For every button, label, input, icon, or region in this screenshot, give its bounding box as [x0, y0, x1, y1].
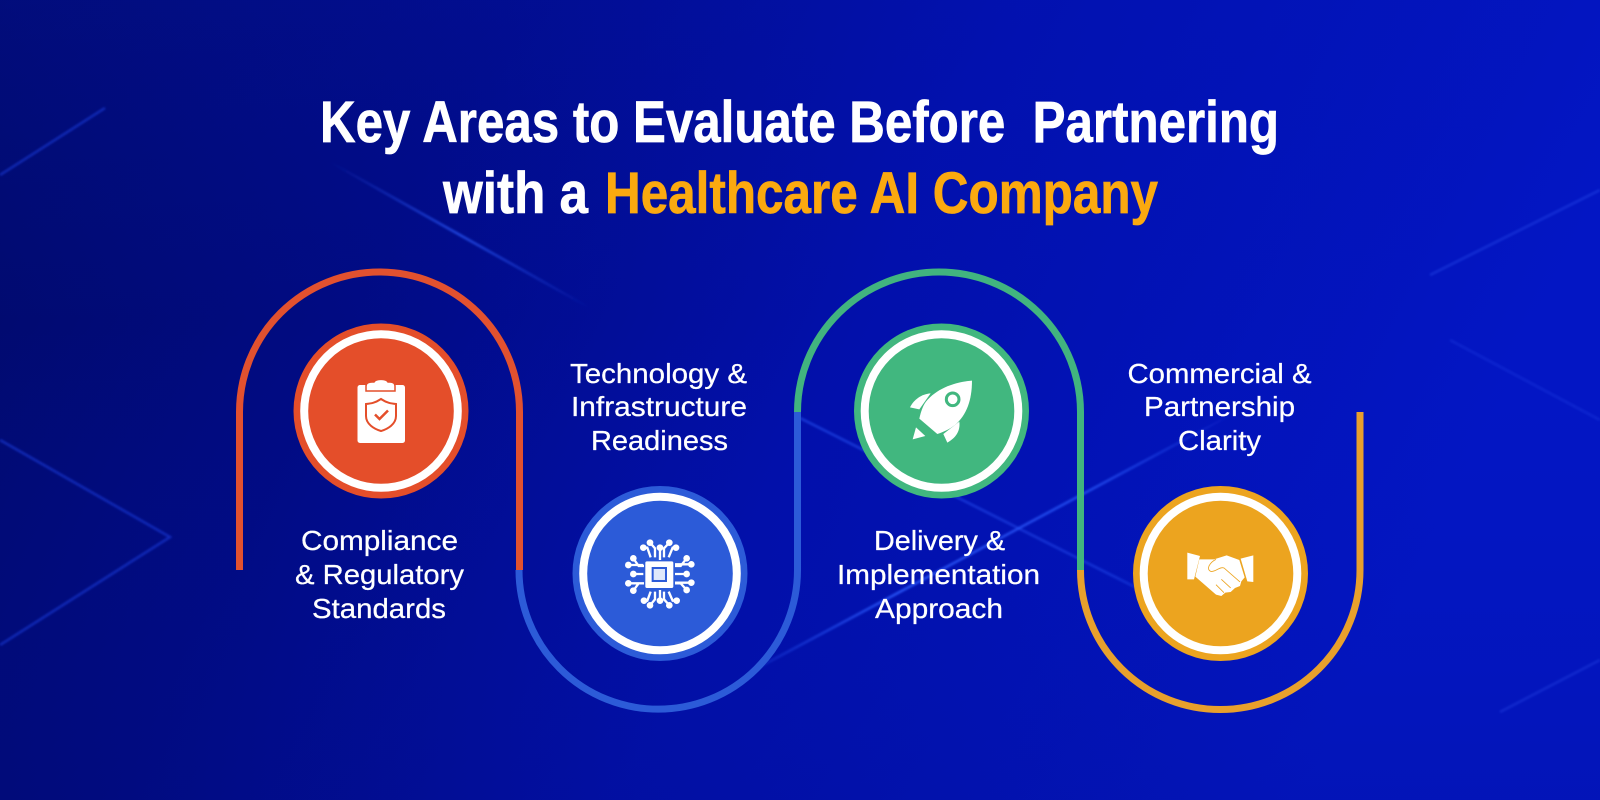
label: commercial: Commercial &	[1128, 358, 1312, 389]
connector path: green arch	[798, 272, 1080, 570]
badge: compliance	[294, 324, 468, 498]
label: delivery: Implementation	[837, 559, 1040, 590]
step 1: compliance	[294, 324, 468, 624]
badge: technology	[572, 486, 748, 661]
icon: rocket	[910, 381, 972, 443]
label: delivery: Delivery &	[874, 525, 1005, 556]
title: with a	[442, 161, 589, 226]
label: commercial: Clarity	[1178, 425, 1261, 456]
label: compliance: & Regulatory	[295, 559, 464, 590]
label: technology: Technology &	[570, 358, 747, 389]
title: Healthcare AI Company	[605, 161, 1158, 226]
connector path: red arch	[240, 272, 520, 570]
title	[320, 90, 1279, 226]
label: commercial: Partnership	[1144, 391, 1295, 422]
label: compliance: Compliance	[301, 525, 458, 556]
badge: commercial	[1133, 486, 1308, 661]
step 2: technology	[570, 358, 748, 661]
icon: clipboard with shield	[358, 379, 405, 443]
connector path: amber curve	[1080, 412, 1360, 710]
icon: circuit chip	[625, 539, 695, 609]
icon: handshake	[1187, 553, 1253, 596]
label: technology: Infrastructure	[571, 391, 747, 422]
label: technology	[570, 358, 747, 456]
badge: delivery	[854, 324, 1029, 498]
label: technology: Readiness	[591, 425, 728, 456]
label: commercial	[1128, 358, 1312, 456]
label: compliance: Standards	[312, 593, 446, 624]
label: compliance	[295, 525, 464, 624]
step 3: delivery	[837, 324, 1040, 624]
label: delivery: Approach	[875, 593, 1003, 624]
step 4: commercial	[1128, 358, 1312, 661]
title: Key Areas to Evaluate Before Partnering	[320, 90, 1279, 155]
label: delivery	[837, 525, 1040, 624]
connector path: blue curve	[519, 412, 798, 709]
